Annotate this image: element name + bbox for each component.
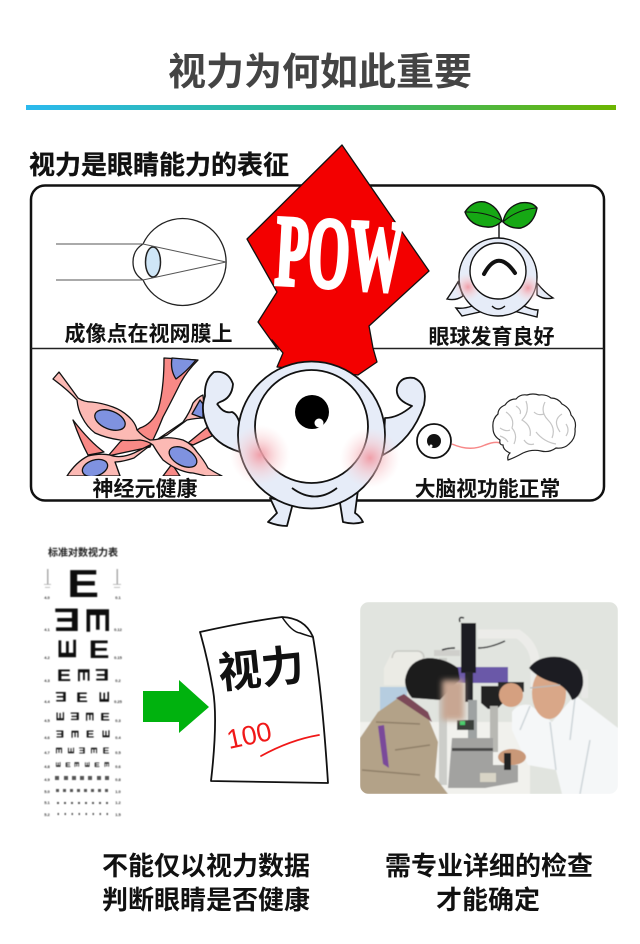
- caption: left: 不能仅以视力数据: [102, 851, 310, 881]
- chart letters row 2: [54, 601, 116, 638]
- chart right scale: 1.5: [115, 812, 122, 817]
- chart letters row 8: E: [79, 746, 85, 755]
- printer handle: [392, 651, 424, 658]
- chart right scale: 0.6: [115, 764, 122, 769]
- machine arch: [478, 634, 535, 690]
- chart right scale: 0.2: [115, 678, 122, 683]
- doctor's lab coat: [512, 695, 618, 794]
- panel divider: [31, 348, 604, 350]
- inner eye: [255, 370, 368, 483]
- chart letters row 6: E: [70, 710, 80, 723]
- title gradient bar: [26, 105, 616, 110]
- chart letters row 4: E: [73, 668, 92, 682]
- machine column left: [468, 700, 477, 738]
- chart letters row 4: E: [57, 667, 71, 686]
- left arm: [203, 372, 240, 452]
- chart left scale: 4.5: [44, 718, 51, 723]
- burst lettering: POW: [273, 194, 406, 313]
- lamp column: [461, 623, 476, 673]
- chart letters row 4: [57, 664, 109, 686]
- printer: [384, 652, 424, 685]
- chart left scale: 4.0: [44, 595, 51, 600]
- doctor's face: [532, 667, 566, 719]
- chart right scale: 1.2: [115, 800, 122, 805]
- chart letters row 9: E: [103, 762, 111, 767]
- chart left scale: [44, 595, 51, 817]
- label: image on retina: 成像点在视网膜上: [64, 322, 232, 346]
- chart letters row 7: E: [102, 729, 112, 738]
- label: normal brain vision function: 大脑视功能正常: [415, 478, 560, 501]
- doctor's lower hand: [498, 749, 526, 765]
- vision score paper: [200, 617, 328, 783]
- label: healthy neurons: 神经元健康: [92, 477, 198, 501]
- chart left scale: 4.3: [44, 678, 51, 683]
- patient's hair: [405, 658, 460, 700]
- chart letters row 9: [54, 761, 111, 769]
- joystick: [504, 753, 511, 770]
- coat shading: [520, 698, 590, 794]
- chart left scale: 5.0: [44, 789, 51, 794]
- chart right scale: 0.12: [114, 627, 123, 632]
- chart letters row 6: E: [83, 712, 96, 722]
- coat folds: [362, 722, 430, 775]
- chart left scale: 4.4: [44, 699, 51, 704]
- right leg: [340, 490, 363, 524]
- chart right scale: 0.8: [115, 777, 122, 782]
- patient's scarf: [396, 694, 432, 722]
- chart letters row 2: E: [54, 601, 80, 638]
- handwritten score: 100: [224, 716, 274, 755]
- chart letters row 3: E: [53, 639, 81, 659]
- eyeball body: [238, 362, 385, 508]
- pupil: [295, 395, 329, 429]
- paper corner fold: [282, 617, 313, 637]
- icon: brain: [493, 394, 576, 460]
- paper heading: 视力: [216, 642, 306, 698]
- chart letters row 9: E: [83, 762, 91, 767]
- chart letters row 3: [53, 635, 109, 663]
- chart right scale: [114, 595, 123, 817]
- chart letters row 8: E: [89, 747, 98, 754]
- doctor's upper hand: [499, 683, 523, 707]
- chart left scale: 4.6: [44, 735, 51, 740]
- coat purple strip: [378, 725, 389, 768]
- chart letters row 9: E: [73, 762, 81, 767]
- purple panel: [456, 666, 508, 684]
- label: eyeball development: 眼球发育良好: [428, 325, 554, 349]
- panel: eye abilities: [31, 186, 604, 501]
- base warning label: [480, 773, 496, 782]
- chart letters row 8: E: [103, 746, 109, 755]
- photo floor: [360, 722, 530, 794]
- caption: right line 2: 才能确定: [436, 885, 540, 915]
- chart letters row 5: E: [76, 691, 88, 706]
- chart left scale: 4.2: [44, 655, 51, 660]
- blue device: [380, 687, 407, 713]
- chart letters row 5: E: [55, 688, 67, 703]
- machine base: [448, 738, 518, 788]
- icon: small eye and optic nerve: [417, 424, 500, 458]
- chart letters row 5: E: [98, 691, 113, 703]
- chart letters row 6: [54, 710, 110, 723]
- icon: eyeball cross-section: [56, 218, 226, 305]
- left blush: [230, 425, 290, 485]
- doctor's chair: [577, 670, 588, 698]
- chart letters row 9: E: [94, 761, 100, 769]
- chart letters row 6: E: [100, 710, 110, 723]
- patient's coat: [360, 698, 448, 794]
- chart right scale: 0.15: [114, 655, 123, 660]
- icon: sprout eye: [447, 202, 553, 317]
- eye chart: [44, 546, 123, 817]
- chart letters row 2: E: [79, 607, 116, 633]
- chart left scale: 4.9: [44, 777, 51, 782]
- chart right scale: 0.4: [115, 735, 122, 740]
- mouth: [292, 488, 337, 496]
- chart letters row 6: E: [54, 711, 67, 721]
- chart right scale: 0.5: [115, 750, 122, 755]
- cable: [442, 618, 505, 650]
- chart letters row 8: E: [54, 747, 63, 754]
- doctor's hair: [529, 657, 583, 700]
- right blush: [340, 428, 400, 488]
- chart left scale: 4.7: [44, 750, 51, 755]
- right arm: [383, 378, 425, 455]
- chart letters row 7: [55, 728, 112, 740]
- arrow: [143, 680, 209, 733]
- icon: neurons: [53, 358, 222, 480]
- doctor's glasses: [530, 685, 560, 688]
- chart left scale: 4.8: [44, 764, 51, 769]
- chart letters row 8: E: [67, 747, 76, 754]
- chin rest poles: [439, 658, 447, 785]
- chart letters row 8: [54, 746, 109, 755]
- chart left scale: 5.1: [44, 800, 51, 805]
- chart letters row 7: E: [55, 728, 64, 738]
- chart title: 标准对数视力表: [48, 546, 118, 559]
- chart right scale: 1.0: [115, 789, 122, 794]
- chart right scale: 0.3: [115, 718, 122, 723]
- subheading: 视力是眼睛能力的表征: [29, 150, 289, 180]
- chart letters row 9: E: [54, 762, 62, 767]
- green indicator: [460, 721, 465, 725]
- chart right scale: 0.1: [115, 595, 122, 600]
- eyepiece: [498, 682, 524, 692]
- patient's blurred face: [442, 680, 464, 720]
- burst shape: [247, 145, 429, 375]
- chart left scale: 4.1: [44, 627, 51, 632]
- chart left scale: 5.2: [44, 812, 51, 817]
- chart right scale: 0.25: [114, 699, 123, 704]
- panel frame: [31, 186, 604, 500]
- slit lamp head: [481, 686, 503, 709]
- burst: POW: [247, 145, 429, 375]
- photo background: [360, 602, 618, 794]
- left leg: [268, 498, 293, 526]
- indicator box: [457, 720, 474, 730]
- caption: left line 2: 判断眼睛是否健康: [102, 885, 310, 915]
- chart letters row 3: E: [89, 635, 109, 663]
- machine column right: [490, 706, 498, 752]
- chart side scale marks: [44, 569, 121, 588]
- top gray bar: [434, 650, 460, 656]
- chart letters row 5: [55, 688, 113, 706]
- caption: right: 需专业详细的检查: [385, 851, 593, 881]
- chart letters row 7: E: [69, 730, 79, 739]
- chart letters row 4: E: [95, 664, 109, 683]
- red underline: [261, 735, 319, 756]
- chart letters row 1: E: [67, 563, 99, 606]
- lamp lower column: [465, 672, 473, 702]
- photo: eye examination: [360, 602, 618, 794]
- character: muscular eyeball: [203, 362, 425, 526]
- chart letters row 9: E: [65, 761, 71, 769]
- chart letters rows 10 to 13: [55, 776, 109, 815]
- machine base stripe: [452, 748, 493, 751]
- chart letters row 7: E: [86, 730, 95, 740]
- paper sheet: [200, 617, 328, 783]
- title: 视力为何如此重要: [168, 52, 472, 94]
